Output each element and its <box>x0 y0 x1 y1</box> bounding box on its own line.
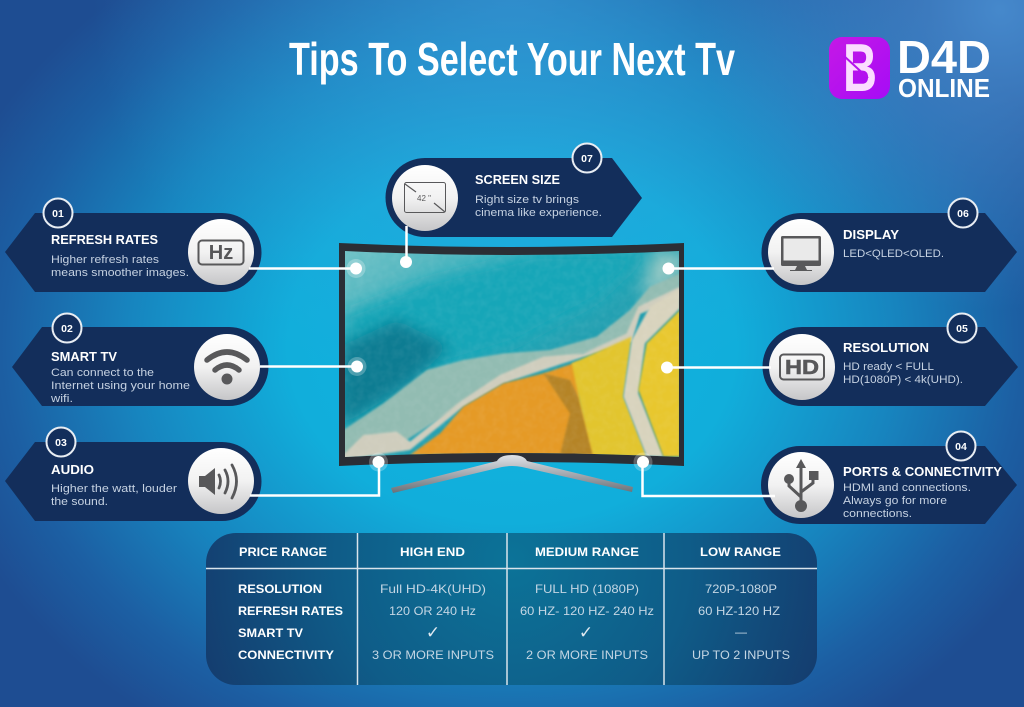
number badge 05: 05 <box>956 323 968 335</box>
icon: speaker <box>188 448 254 514</box>
column: low range: 60 HZ-120 HZ <box>698 604 780 618</box>
icon: wifi <box>194 334 260 400</box>
illustration: curved tv <box>339 243 684 493</box>
pale sand band <box>623 288 680 457</box>
number badge 06: 06 <box>957 208 969 220</box>
icon: HD: HD <box>785 357 819 379</box>
icon: 42 inch screen <box>392 165 458 231</box>
number badge 05 <box>948 314 976 342</box>
icon: logo badge: B <box>843 30 877 106</box>
column: high end: 120 OR 240 Hz <box>389 604 476 618</box>
deep water <box>345 252 642 367</box>
yellow pool <box>638 310 680 457</box>
icon: usb <box>768 452 834 518</box>
tv screen image <box>340 245 683 460</box>
connector: resolution <box>661 362 771 374</box>
connector: audio <box>250 452 388 496</box>
text: resolution description: HD ready < FULL <box>843 361 934 373</box>
column: low range <box>692 582 790 662</box>
connector: refresh rates <box>249 259 366 278</box>
column: high end <box>372 582 494 662</box>
text: ports description <box>843 482 971 520</box>
logo wordmark: ONLINE <box>898 73 990 103</box>
text: ports description: Always go for more <box>843 495 947 507</box>
table row labels: SMART TV <box>238 626 303 640</box>
heading: refresh rates: REFRESH RATES <box>51 233 158 247</box>
text: screen size description <box>475 194 602 219</box>
heading: resolution: RESOLUTION <box>843 341 929 355</box>
number badge 07 <box>572 144 602 172</box>
comparison table <box>206 533 817 685</box>
text: ports description: connections. <box>843 508 912 520</box>
number badge 03: 03 <box>55 437 67 449</box>
text: smart tv description <box>50 367 190 405</box>
number badge 03 <box>46 428 76 456</box>
column: medium range: 60 HZ- 120 HZ- 240 Hz <box>520 604 654 618</box>
icon: Hz <box>188 219 254 285</box>
text: refresh rates description <box>51 254 189 279</box>
icon: HD <box>769 334 835 400</box>
heading: screen size: SCREEN SIZE <box>475 173 560 187</box>
heading: smart tv: SMART TV <box>51 350 118 364</box>
text: smart tv description: Internet using your home <box>51 380 190 392</box>
panel: display <box>762 198 1017 292</box>
logo: D4D Online <box>829 30 991 106</box>
connector: screen size <box>400 226 412 268</box>
text: refresh rates description: means smoother images. <box>51 267 189 279</box>
panel: audio <box>5 428 262 521</box>
icon: Hz: Hz <box>209 242 233 264</box>
text: screen size description: cinema like experience. <box>475 207 602 219</box>
icon: monitor <box>768 219 834 285</box>
foam coast <box>343 273 680 457</box>
number badge 07: 07 <box>581 153 593 165</box>
table header row: PRICE RANGE <box>239 545 327 559</box>
icon: 42 inch screen: 42 " <box>417 194 431 203</box>
text: audio description <box>51 483 177 508</box>
heading: display: DISPLAY <box>843 228 900 242</box>
panel: smart tv <box>12 314 268 406</box>
number badge 06 <box>948 198 978 228</box>
table header row: HIGH END <box>400 545 465 559</box>
table row labels: REFRESH RATES <box>238 604 343 618</box>
text: smart tv description: wifi. <box>50 393 73 405</box>
column: low range: 720P-1080P <box>705 582 777 596</box>
panel: resolution <box>763 314 1018 406</box>
number badge 01 <box>44 198 72 228</box>
table row labels: CONNECTIVITY <box>238 648 334 662</box>
column: high end: Full HD-4K(UHD) <box>380 582 486 596</box>
column: high end: ✓ <box>426 623 440 643</box>
yellow field <box>572 337 647 457</box>
text: refresh rates description: Higher refresh rates <box>51 254 160 266</box>
number badge 01: 01 <box>52 208 64 220</box>
text: smart tv description: Can connect to the <box>51 367 154 379</box>
connector: ports <box>634 452 775 496</box>
table header row: LOW RANGE <box>700 545 781 559</box>
table row labels: RESOLUTION <box>238 582 322 596</box>
heading: ports and connectivity: PORTS & CONNECTIVITY <box>843 465 1003 479</box>
column: low range: UP TO 2 INPUTS <box>692 648 790 662</box>
number badge 04 <box>946 432 976 460</box>
text: resolution description <box>843 361 963 386</box>
column: low range: — <box>735 625 747 639</box>
tv stand <box>391 455 633 493</box>
text: display description: LED<QLED<OLED. <box>843 248 944 260</box>
panel: ports and connectivity <box>761 432 1017 524</box>
connector: smart tv <box>260 357 366 376</box>
column: medium range: ✓ <box>579 623 593 643</box>
heading: audio: AUDIO <box>51 463 94 477</box>
number badge 02 <box>52 314 82 342</box>
column: medium range: FULL HD (1080P) <box>535 582 639 596</box>
column: high end: 3 OR MORE INPUTS <box>372 648 494 662</box>
column: medium range <box>520 582 654 662</box>
text: resolution description: HD(1080P) < 4k(UHD). <box>843 374 963 386</box>
title: Tips To Select Your Next Tv <box>289 33 735 85</box>
text: audio description: Higher the watt, louder <box>51 483 177 495</box>
table header row <box>239 545 781 559</box>
table header row: MEDIUM RANGE <box>535 545 639 559</box>
number badge 02: 02 <box>61 323 73 335</box>
table row labels <box>238 582 343 662</box>
connector: display <box>662 262 774 274</box>
tv bezel <box>339 243 684 466</box>
logo wordmark: D4D <box>897 31 991 83</box>
column: medium range: 2 OR MORE INPUTS <box>526 648 648 662</box>
text: ports description: HDMI and connections. <box>843 482 971 494</box>
orange sediment <box>410 362 597 455</box>
text: screen size description: Right size tv brings <box>475 194 580 206</box>
panel: refresh rates <box>5 198 262 292</box>
number badge 04: 04 <box>955 441 967 453</box>
text: audio description: the sound. <box>51 496 108 508</box>
panel: screen size <box>386 144 642 237</box>
